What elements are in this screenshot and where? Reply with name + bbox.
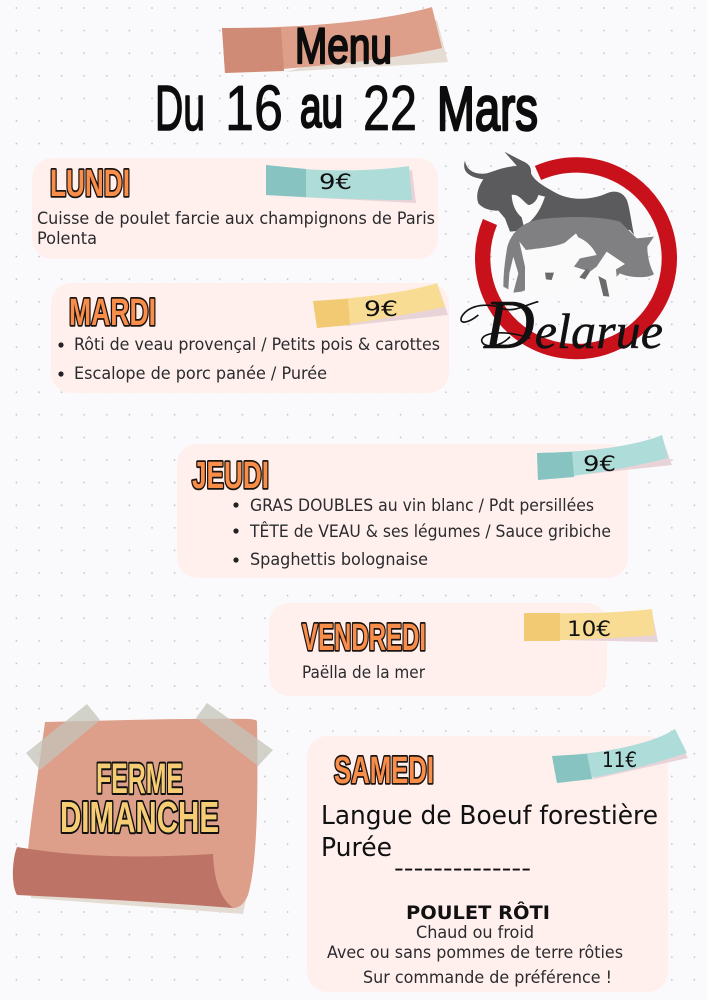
dish text: lundi: Polenta xyxy=(37,229,97,248)
closed notice text: FERME xyxy=(96,755,183,803)
price tape: 11 euros xyxy=(552,729,688,783)
dish list: mardi xyxy=(58,335,440,383)
title: Menu on tape xyxy=(222,7,448,74)
panel: vendredi xyxy=(269,603,658,696)
poulet roti offer: Chaud ou froid xyxy=(416,923,534,942)
dish list: jeudi: Spaghettis bolognaise xyxy=(250,550,428,569)
poulet roti offer: Avec ou sans pommes de terre rôties xyxy=(327,943,623,962)
closed notice text: DIMANCHE xyxy=(60,793,219,842)
heading: lundi: LUNDI xyxy=(50,163,130,205)
dish list: mardi: Escalope de porc panée / Purée xyxy=(74,364,327,383)
poulet roti offer: POULET RÔTI xyxy=(406,900,550,924)
title: date range: au xyxy=(300,75,343,140)
heading: samedi: SAMEDI xyxy=(334,750,434,792)
panel: lundi xyxy=(32,158,438,259)
dish text: lundi xyxy=(37,209,435,248)
price tape: 9 euros xyxy=(313,283,448,328)
closed notice text xyxy=(60,755,219,842)
dish text: samedi: Purée xyxy=(321,833,392,863)
dish list: jeudi xyxy=(233,496,611,569)
sticky note: ferme dimanche xyxy=(13,703,273,914)
dish list: jeudi: TÊTE de VEAU & ses légumes / Sauce gribiche xyxy=(249,522,611,541)
title: date range: 22 xyxy=(363,72,417,144)
title: date range: 16 xyxy=(225,72,283,144)
dashed separator: -------------- xyxy=(394,854,531,882)
dish list: jeudi: GRAS DOUBLES au vin blanc / Pdt persillées xyxy=(250,496,594,515)
title: date range: Mars xyxy=(437,75,538,144)
price tape: 10 euros xyxy=(524,609,658,642)
heading: mardi: MARDI xyxy=(69,292,156,334)
dish text: lundi: Cuisse de poulet farcie aux champignons de Paris xyxy=(37,209,435,228)
poulet roti offer: Sur commande de préférence ! xyxy=(363,968,612,987)
price tape: 9 euros xyxy=(537,435,672,480)
dish text: samedi xyxy=(321,801,658,863)
heading: vendredi: VENDREDI xyxy=(302,617,426,659)
title: date range xyxy=(155,72,538,144)
poulet roti offer xyxy=(327,900,623,987)
price tape: 9 euros xyxy=(266,165,416,203)
price tape: 9 euros: 9€ xyxy=(319,170,352,194)
panel: mardi xyxy=(51,283,449,393)
price tape: 11 euros: 11€ xyxy=(602,748,637,772)
panel: jeudi xyxy=(177,435,672,578)
page curl xyxy=(13,847,233,908)
logo: Delarue butcher: Delarue xyxy=(483,287,663,364)
dish text: samedi: Langue de Boeuf forestière xyxy=(321,801,658,831)
price tape: 10 euros: 10€ xyxy=(567,617,611,641)
heading: jeudi: JEUDI xyxy=(192,455,269,497)
price tape: 9 euros: 9€ xyxy=(583,452,616,476)
tape: left xyxy=(26,704,100,770)
dish text: vendredi: Paëlla de la mer xyxy=(302,663,425,682)
panel: samedi xyxy=(307,729,688,992)
logo: Delarue butcher xyxy=(461,152,669,364)
dish list: mardi: Rôti de veau provençal / Petits pois & carottes xyxy=(74,335,440,354)
tape: right xyxy=(196,703,273,766)
price tape: 9 euros: 9€ xyxy=(364,297,398,321)
title: Menu on tape: Menu xyxy=(295,18,392,74)
title: date range: Du xyxy=(155,72,205,144)
